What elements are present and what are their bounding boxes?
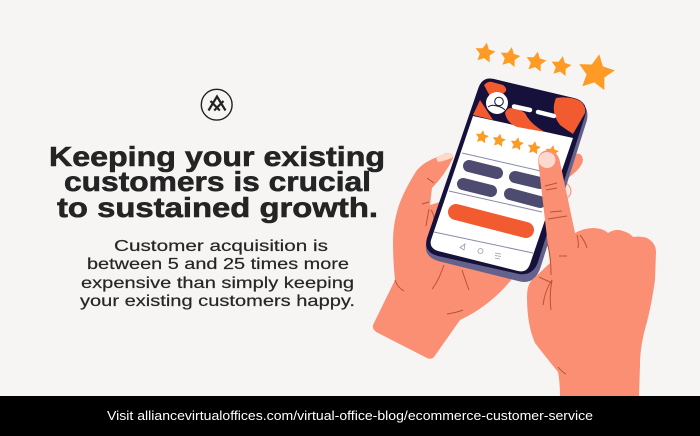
nav icons bbox=[460, 244, 501, 259]
body text: between 5 and 25 times more bbox=[87, 256, 349, 273]
palm and thumb bbox=[373, 153, 512, 359]
screen bbox=[431, 116, 573, 271]
ring finger outline bbox=[564, 181, 571, 199]
logo bbox=[201, 89, 232, 120]
hand creases bbox=[395, 178, 469, 314]
title: customers is crucial bbox=[64, 166, 371, 197]
left hand bbox=[373, 153, 583, 359]
thumb nail bbox=[436, 153, 453, 162]
footer link text: Visit alliancevirtualoffices.com/virtual-office-blog/ecommerce-customer-service bbox=[107, 408, 593, 423]
title bbox=[49, 141, 385, 223]
icon: floating rating stars bbox=[474, 41, 617, 91]
fingers behind phone bbox=[562, 154, 583, 180]
body text: your existing customers happy. bbox=[80, 293, 355, 310]
body text: Customer acquisition is bbox=[114, 238, 328, 255]
app header shapes bbox=[473, 82, 585, 134]
finger nail bbox=[538, 152, 556, 168]
header dashes bbox=[514, 106, 554, 116]
illustration: hands and phone bbox=[373, 41, 656, 396]
phone shadow edge bbox=[426, 80, 587, 282]
body text: expensive than simply keeping bbox=[81, 275, 354, 292]
footer bar bbox=[0, 396, 700, 436]
option buttons bbox=[463, 166, 540, 202]
title: Keeping your existing bbox=[49, 141, 385, 172]
phone body bbox=[426, 78, 586, 274]
icon: avatar bbox=[486, 92, 508, 114]
right hand with pointing finger bbox=[527, 150, 656, 396]
phone bbox=[426, 78, 587, 282]
title: to sustained growth. bbox=[57, 192, 378, 223]
body text bbox=[80, 238, 355, 310]
finger creases bbox=[539, 183, 587, 374]
call to action button bbox=[456, 212, 526, 230]
screen rating stars bbox=[474, 129, 560, 159]
screen divider lines bbox=[434, 153, 545, 253]
